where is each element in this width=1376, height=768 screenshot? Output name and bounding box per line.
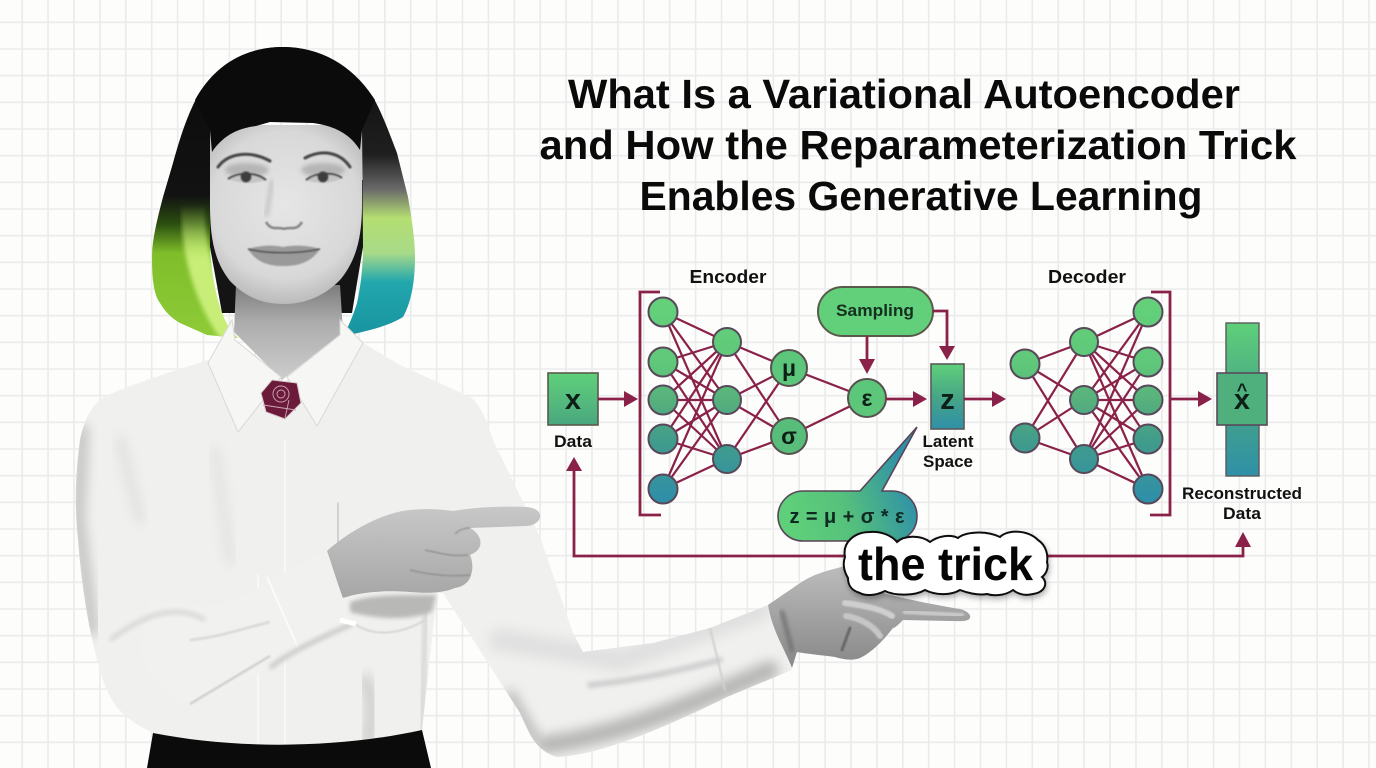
label: Reconstructed Data: Reconstructed [1182, 484, 1302, 503]
title: Enables Generative Learning [640, 173, 1202, 219]
upper pointing hand [327, 507, 540, 598]
neck [234, 285, 343, 380]
shadow under upper hand [350, 595, 436, 618]
feedback arrow to Data [566, 457, 860, 556]
formula callout: z = μ + σ * ε [790, 506, 905, 528]
label: Decoder: Decoder [1048, 266, 1126, 287]
back hair [210, 180, 363, 313]
mouth [248, 246, 320, 266]
upper hand finger detail [410, 528, 470, 576]
person: woman pointing at diagram [76, 47, 970, 768]
label: Reconstructed Data: Data [1223, 504, 1262, 523]
label: Latent Space: Latent [922, 432, 974, 451]
eyebrows [218, 153, 350, 167]
forearm folds [110, 577, 356, 704]
sigma node: σ [781, 423, 797, 449]
nose [266, 180, 302, 229]
decoder bracket [1150, 292, 1170, 515]
latent box z [931, 364, 964, 429]
arrow: x to encoder [598, 391, 638, 407]
sticker: the trick: the trick [858, 538, 1033, 590]
eyes [228, 172, 342, 183]
arrow: z to decoder [964, 391, 1006, 407]
eye shadows [225, 163, 345, 177]
left forearm sleeve and cuff [140, 550, 356, 705]
decoder connections [1025, 312, 1148, 489]
label: Latent Space [922, 432, 974, 471]
input box x: x [565, 384, 581, 416]
rose pin [261, 380, 301, 419]
mu node: μ [782, 355, 796, 381]
output bar [1226, 323, 1259, 476]
title [540, 71, 1297, 219]
output box x-hat: ^ [1237, 380, 1248, 400]
decoder nodes [1010, 298, 1162, 504]
hair right side [283, 47, 415, 337]
label: Encoder: Encoder [690, 266, 766, 287]
arrow: epsilon to z [886, 391, 927, 407]
mu node [771, 350, 807, 386]
encoder connections [663, 312, 867, 489]
hair left side [152, 47, 283, 340]
face [210, 125, 362, 304]
sampling pill [818, 287, 933, 336]
formula callout [778, 427, 917, 541]
arrow: decoder to output [1170, 391, 1212, 407]
feedback arrow to Reconstructed Data [1040, 532, 1251, 556]
output box x-hat [1217, 373, 1267, 425]
arrow: sampling to epsilon [859, 336, 875, 374]
latent box z: z [940, 384, 955, 416]
hair crown and bangs [195, 47, 375, 152]
arrow: sampling to z [933, 311, 955, 360]
title: and How the Reparameterization Trick [540, 122, 1297, 168]
sigma node [771, 418, 807, 454]
encoder bracket [640, 292, 661, 515]
encoder nodes [648, 298, 741, 504]
skirt [147, 730, 431, 768]
label: Latent Space: Space [923, 452, 973, 471]
label: Reconstructed Data [1182, 484, 1302, 523]
output box x-hat: x [1234, 384, 1250, 416]
lower pointing hand [768, 566, 970, 668]
diagram: VAE architecture [548, 266, 1302, 556]
label: Data: Data [554, 432, 593, 451]
shirt shading [78, 430, 770, 745]
input box x [548, 373, 598, 425]
epsilon node: ε [862, 385, 873, 411]
collar [208, 320, 363, 432]
epsilon node [848, 379, 886, 417]
sampling pill: Sampling [836, 301, 914, 320]
title: What Is a Variational Autoencoder [568, 71, 1240, 117]
lower hand finger detail [782, 603, 962, 650]
shirt body and right arm [76, 343, 792, 757]
